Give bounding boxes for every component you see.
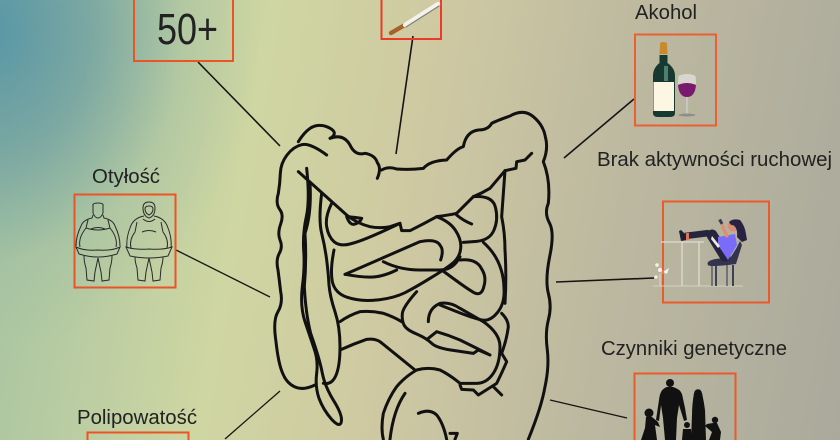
connector: inactivity to intestine xyxy=(556,278,654,282)
heading: Otyłość: Otyłość xyxy=(92,166,160,188)
connector: cigarette to intestine xyxy=(396,36,413,154)
panel: alcohol xyxy=(635,2,716,126)
connector: 50+ to intestine xyxy=(198,62,280,146)
icon: intestine xyxy=(275,112,552,439)
heading: Akohol: Akohol xyxy=(635,2,697,24)
panel: smoking xyxy=(382,0,441,39)
icon: obese man xyxy=(76,203,120,281)
panel: genetic factors xyxy=(601,338,787,440)
icon: wine bottle xyxy=(653,42,675,117)
icon: family silhouette xyxy=(641,379,721,440)
connector: genetics to intestine xyxy=(550,400,627,418)
heading: Brak aktywności ruchowej: Brak aktywności ruchowej xyxy=(597,149,832,171)
label: 50+: 50+ xyxy=(157,6,218,54)
heading: Czynniki genetyczne: Czynniki genetyczne xyxy=(601,338,787,360)
connector: polyposis to intestine xyxy=(225,391,280,439)
icon: obese woman xyxy=(126,202,172,281)
panel: polyposis xyxy=(77,407,197,440)
panel: obesity xyxy=(74,166,176,288)
connector: obesity to intestine xyxy=(176,250,270,297)
icon: wine glass xyxy=(678,74,696,116)
icon: woman with feet on table xyxy=(653,219,747,286)
heading: Polipowatość: Polipowatość xyxy=(77,407,197,429)
panel: physical inactivity xyxy=(597,149,832,302)
icon: cigarette xyxy=(391,4,439,33)
panel: age 50+ xyxy=(134,0,233,61)
connector: alcohol to intestine xyxy=(564,99,634,158)
